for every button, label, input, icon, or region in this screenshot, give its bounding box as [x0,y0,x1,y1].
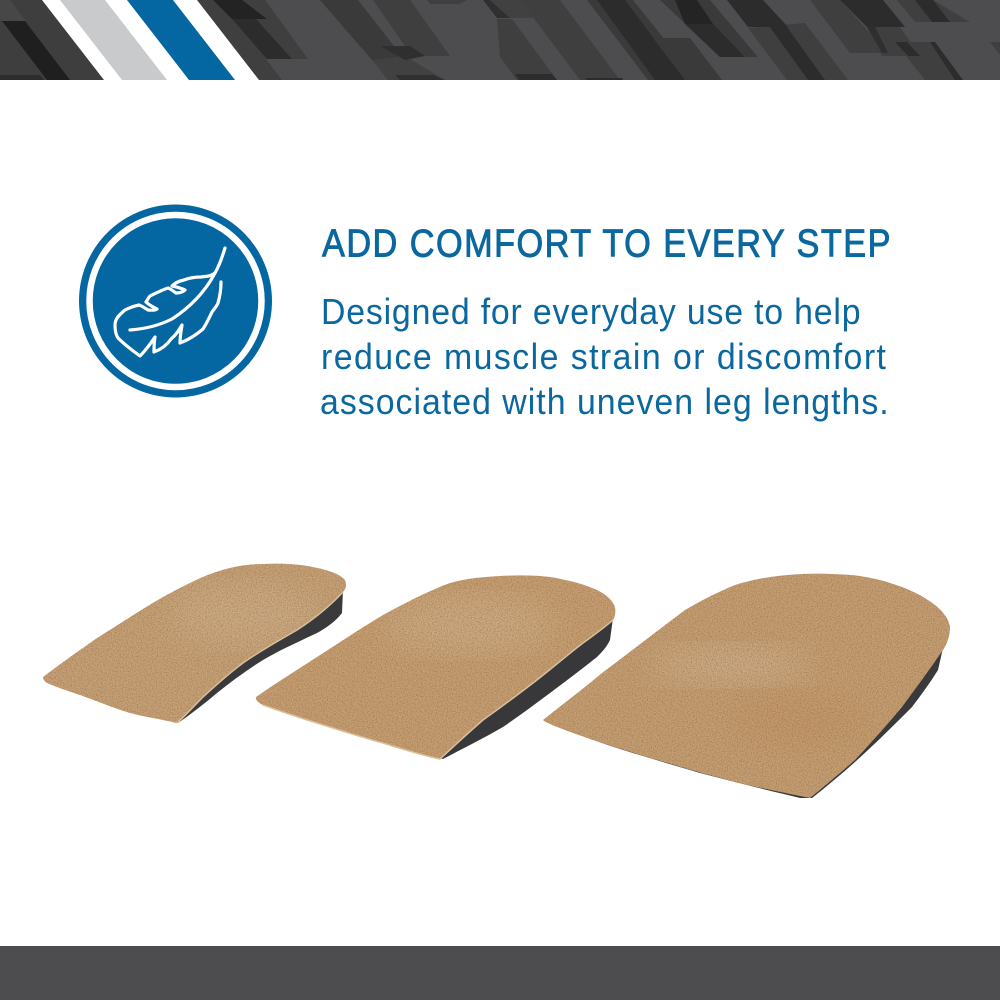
footer bar [0,946,1000,1000]
heading: ADD COMFORT TO EVERY STEP [322,221,890,265]
body text: Designed for everyday use to help [321,292,861,332]
body text [320,292,889,422]
product: large heel lift [540,570,955,802]
body text: reduce muscle strain or discomfort [321,337,886,377]
product: medium heel lift [250,570,620,762]
icon: feather outline [115,248,225,356]
white and colour stripes [42,0,259,80]
icon: feather badge [79,204,272,398]
header banner [0,0,1000,80]
product: small heel lift [40,560,350,728]
body text: associated with uneven leg lengths. [320,382,889,422]
